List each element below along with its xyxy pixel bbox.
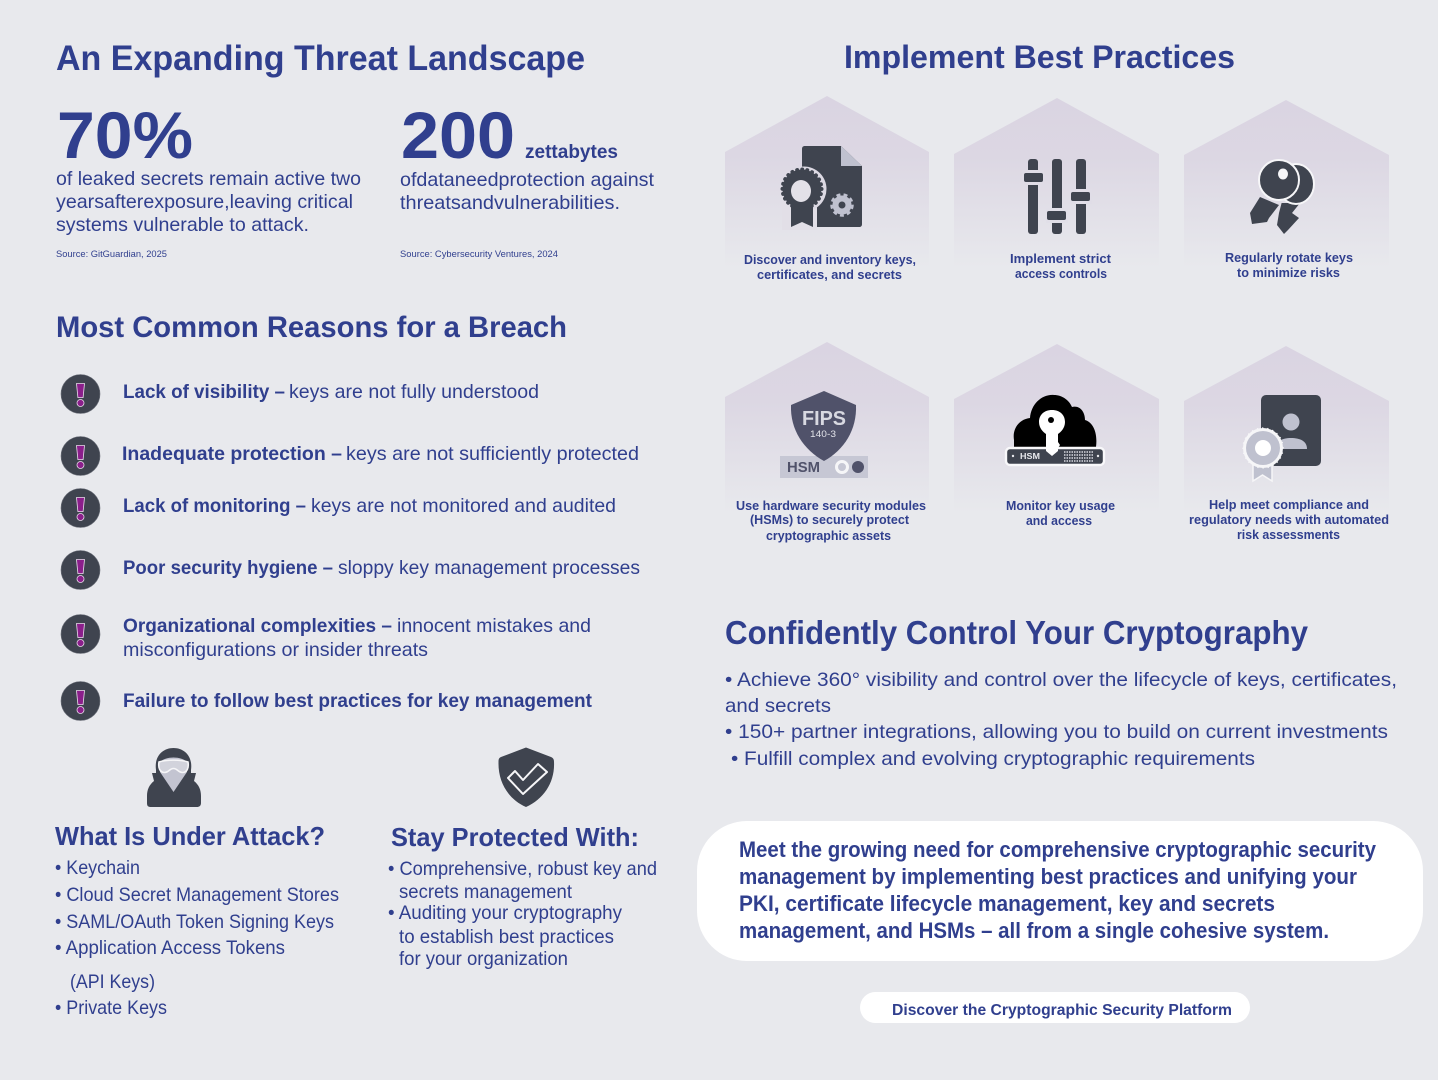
stat: 70% — [56, 98, 361, 260]
button: discover the platform: Discover the Cryptographic Security Platform — [892, 1002, 1232, 1019]
stat: 70%: systems vulnerable to attack. — [56, 214, 309, 236]
reason: protection: keys are not sufficiently protected — [346, 443, 639, 465]
panel: stay protected with — [388, 748, 657, 970]
card: discover and inventory: certificates, and secrets — [757, 267, 902, 282]
list: benefits: • Fulfill complex and evolving cryptographic requirements — [731, 748, 1255, 770]
reason: best practices: Failure to follow best practices for key management — [123, 690, 592, 712]
card: monitor key usage: and access — [1026, 513, 1092, 528]
list: benefits: • 150+ partner integrations, allowing you to build on current investments — [725, 721, 1388, 743]
callout: meet the growing need — [697, 821, 1423, 961]
callout: meet the growing need: management by implementing best practices and unifying your — [739, 864, 1357, 889]
reason: complexities: misconfigurations or insider threats — [123, 639, 428, 661]
button: discover the platform — [860, 992, 1250, 1023]
card: rotate keys: to minimize risks — [1237, 265, 1340, 280]
panel: confidently control — [725, 614, 1397, 770]
reason: monitoring — [61, 488, 616, 528]
reason: protection — [61, 436, 639, 476]
icon: hooded hacker — [147, 748, 201, 807]
list: protections: • Comprehensive, robust key and — [388, 858, 657, 880]
reason: complexities: innocent mistakes and — [397, 615, 591, 637]
list: attack targets: • Application Access Tokens — [55, 937, 285, 959]
panel: expanding threat landscape — [56, 39, 655, 260]
card: rotate keys: Regularly rotate keys — [1225, 250, 1353, 265]
stat: 70%: of leaked secrets remain active two — [56, 168, 361, 190]
callout: meet the growing need: management, and HSMs – all from a single cohesive system. — [739, 918, 1329, 943]
card: hardware security modules: (HSMs) to securely protect — [750, 512, 910, 527]
stat: 200 zettabytes: Source: Cybersecurity Ventures, 2024 — [400, 249, 558, 260]
stat: 70%: 70% — [57, 98, 193, 172]
reason: hygiene: Poor security hygiene – — [123, 557, 333, 579]
card: monitor key usage: Monitor key usage — [1006, 498, 1115, 513]
heading: Confidently Control Your Cryptography — [725, 614, 1309, 651]
list: protections: to establish best practices — [399, 926, 614, 948]
reason: hygiene: sloppy key management processes — [338, 557, 640, 579]
card: hardware security modules: FIPS — [802, 408, 846, 430]
card: hardware security modules — [725, 342, 929, 543]
list: protections: • Auditing your cryptography — [388, 902, 622, 924]
card: hardware security modules: Use hardware security modules — [736, 498, 926, 513]
callout: meet the growing need: Meet the growing need for comprehensive cryptographic security — [739, 837, 1377, 862]
list: benefits — [725, 669, 1397, 770]
stat: 200 zettabytes: ofdataneedprotection against — [400, 169, 655, 191]
card: compliance — [1184, 346, 1389, 542]
panel: what is under attack — [55, 748, 339, 1019]
card: compliance: Help meet compliance and — [1209, 497, 1369, 512]
icon: shield check — [498, 748, 554, 807]
heading: What Is Under Attack? — [55, 821, 325, 851]
callout: meet the growing need: PKI, certificate lifecycle management, key and secrets — [739, 891, 1275, 916]
list: attack targets — [55, 857, 339, 1019]
list: protections: secrets management — [399, 881, 573, 903]
reason: visibility: Lack of visibility – — [123, 381, 285, 403]
reason: monitoring: Lack of monitoring – — [123, 495, 306, 517]
stat: 200 zettabytes: 200 — [401, 98, 515, 172]
stat: 200 zettabytes: threatsandvulnerabilities. — [400, 192, 620, 214]
list: attack targets: • Cloud Secret Management Stores — [55, 884, 339, 906]
reason: visibility — [61, 374, 539, 414]
heading: Stay Protected With: — [391, 822, 639, 852]
reason: complexities — [61, 614, 591, 661]
reason: visibility: keys are not fully understood — [289, 381, 539, 403]
card: access controls: access controls — [1015, 266, 1107, 281]
list: benefits: • Achieve 360° visibility and control over the lifecycle of keys, certificates, — [725, 669, 1397, 691]
card: discover and inventory — [725, 96, 929, 282]
card: rotate keys — [1184, 100, 1389, 280]
title: An Expanding Threat Landscape — [56, 39, 585, 78]
reason: best practices — [61, 682, 592, 720]
list: protections: for your organization — [399, 948, 568, 970]
reason: protection: Inadequate protection – — [122, 443, 342, 465]
list: attack targets: • Private Keys — [55, 997, 167, 1019]
list: attack targets: (API Keys) — [70, 971, 155, 993]
card: monitor key usage — [954, 344, 1159, 528]
card: discover and inventory: Discover and inventory keys, — [744, 252, 916, 267]
reason: hygiene — [61, 550, 640, 590]
reason: complexities: Organizational complexities – — [123, 615, 392, 637]
stat: 70%: Source: GitGuardian, 2025 — [56, 249, 167, 260]
card: hardware security modules: 140-3 — [810, 429, 836, 439]
card: compliance: risk assessments — [1237, 527, 1340, 542]
card: access controls: Implement strict — [1010, 251, 1112, 266]
stat: 70%: yearsafterexposure,leaving critical — [56, 191, 353, 213]
list: benefits: and secrets — [725, 695, 831, 717]
stat: 200 zettabytes: zettabytes — [525, 141, 618, 163]
heading: Most Common Reasons for a Breach — [56, 311, 567, 344]
reason: monitoring: keys are not monitored and audited — [311, 495, 616, 517]
list: attack targets: • Keychain — [55, 857, 140, 879]
card: hardware security modules: cryptographic assets — [766, 528, 891, 543]
card: compliance: regulatory needs with automated — [1189, 512, 1389, 527]
stat: 200 zettabytes — [400, 98, 655, 260]
list: protections — [388, 858, 657, 970]
card: hardware security modules: HSM — [787, 459, 820, 476]
heading: Implement Best Practices — [844, 39, 1235, 75]
panel: reasons for a breach — [56, 311, 640, 720]
card: access controls — [954, 98, 1159, 281]
panel: best practices — [725, 39, 1389, 543]
card: monitor key usage: HSM — [1020, 451, 1040, 461]
list: attack targets: • SAML/OAuth Token Signing Keys — [55, 911, 334, 933]
